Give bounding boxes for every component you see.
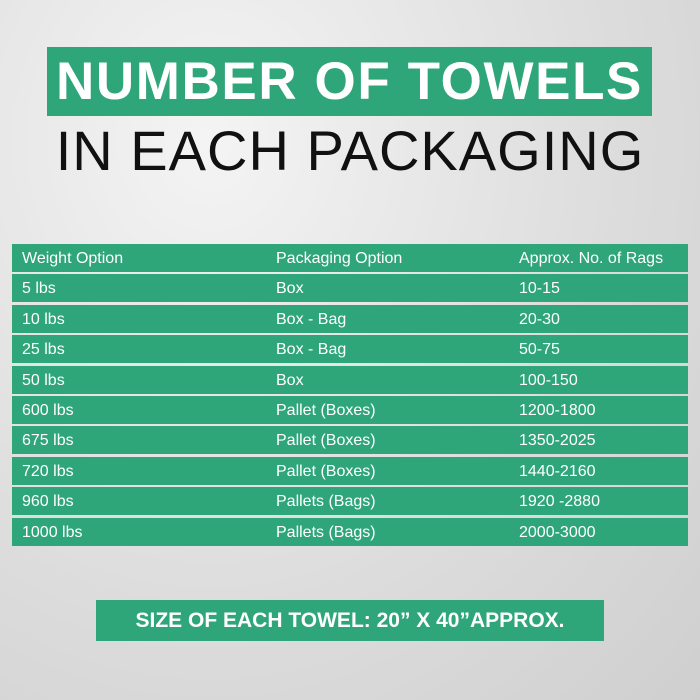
table: 1920 -2880: [519, 493, 600, 510]
table: 1350-2025: [519, 432, 596, 449]
table: 5 lbs: [22, 280, 56, 297]
table: 2000-3000: [519, 524, 596, 541]
table: 20-30: [519, 311, 560, 328]
table: 1000 lbs: [22, 524, 82, 541]
footer: towel size: SIZE OF EACH TOWEL: 20” X 40”APPROX.: [135, 609, 565, 632]
table: 720 lbs: [22, 463, 74, 480]
table: 100-150: [519, 372, 578, 389]
subtitle: IN EACH PACKAGING: [56, 119, 644, 182]
table: Pallets (Bags): [276, 493, 376, 510]
table: 10 lbs: [22, 311, 65, 328]
table: 675 lbs: [22, 432, 74, 449]
table: 1440-2160: [519, 463, 596, 480]
table: 600 lbs: [22, 402, 74, 419]
title: NUMBER OF TOWELS: [56, 52, 643, 111]
table: Packaging Option: [276, 250, 402, 267]
table: 960 lbs: [22, 493, 74, 510]
table: 50-75: [519, 341, 560, 358]
table: Weight Option: [22, 250, 123, 267]
table: Pallet (Boxes): [276, 463, 376, 480]
table: Approx. No. of Rags: [519, 250, 663, 267]
table: Pallet (Boxes): [276, 402, 376, 419]
table: Box - Bag: [276, 341, 346, 358]
table: 25 lbs: [22, 341, 65, 358]
table: [12, 244, 688, 546]
table: 50 lbs: [22, 372, 65, 389]
table: 10-15: [519, 280, 560, 297]
table: Pallet (Boxes): [276, 432, 376, 449]
table: Box: [276, 372, 304, 389]
footer: towel size: [96, 600, 604, 641]
table: Box: [276, 280, 304, 297]
table: Pallets (Bags): [276, 524, 376, 541]
table: Box - Bag: [276, 311, 346, 328]
table: 1200-1800: [519, 402, 596, 419]
